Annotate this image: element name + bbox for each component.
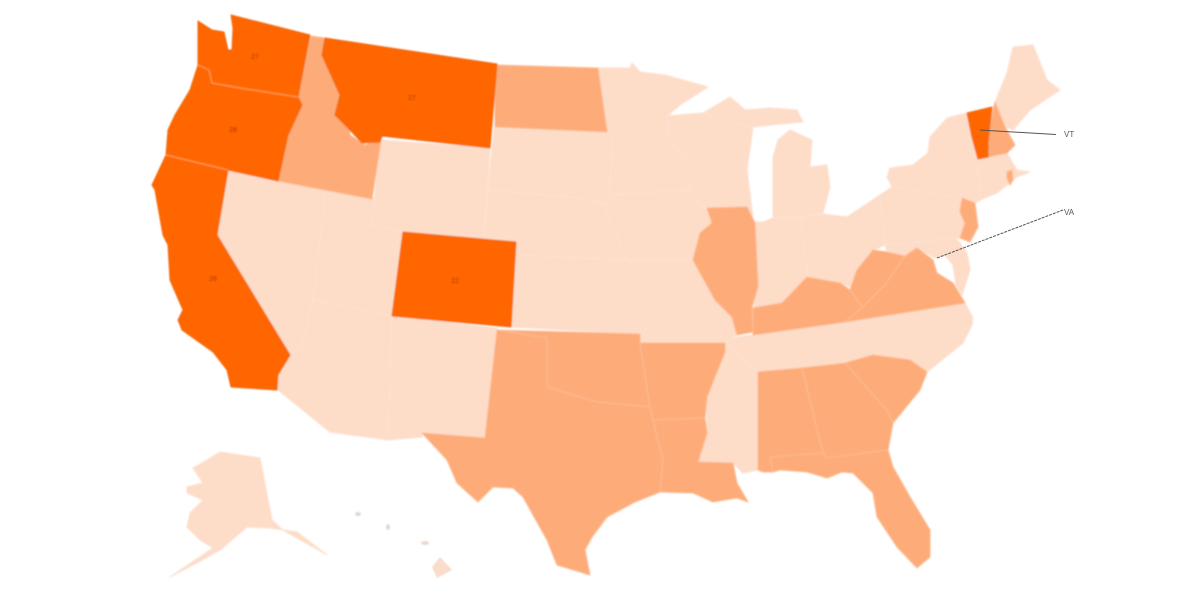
callout: Virginia leader line <box>937 208 1075 258</box>
states map group: 26 <box>209 276 217 283</box>
callout: Vermont leader line <box>980 130 1074 139</box>
states map group: 28 <box>229 127 237 134</box>
states map group: 22 <box>451 278 459 285</box>
callout: Vermont leader line: VT <box>1064 130 1074 139</box>
states map group: 27 <box>408 95 416 102</box>
callout: Virginia leader line: VA <box>1064 208 1075 217</box>
states map group: 27 <box>251 54 259 61</box>
states map group <box>152 15 1060 578</box>
